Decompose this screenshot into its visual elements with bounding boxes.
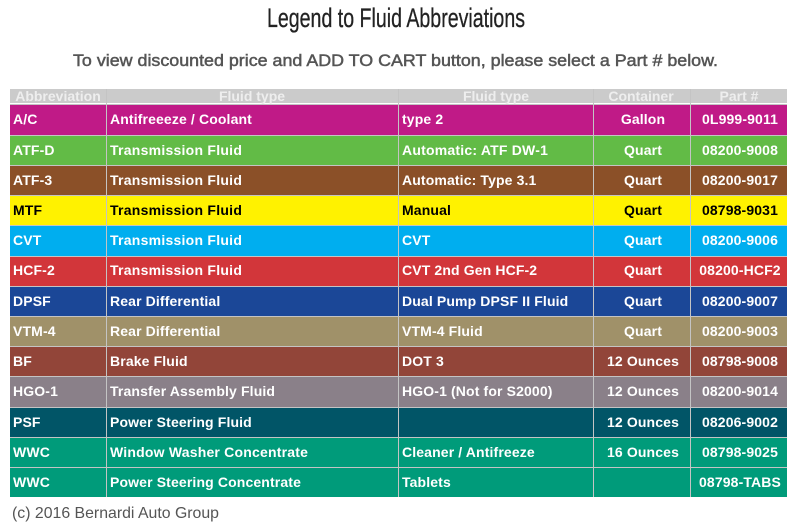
row: HGO-1: 08200-9014	[702, 383, 778, 399]
row: WWC steering: Tablets	[402, 474, 451, 490]
row: PSF: Power Steering Fluid	[110, 414, 252, 430]
row: PSF: PSF	[13, 414, 41, 430]
row: HCF-2	[10, 256, 787, 287]
row: PSF: 08206-9002	[702, 414, 778, 430]
row: ATF-D: Quart	[624, 142, 662, 158]
row: HCF-2: CVT 2nd Gen HCF-2	[402, 262, 537, 278]
row: ATF-D: Transmission Fluid	[110, 142, 242, 158]
row: A/C: 0L999-9011	[702, 111, 778, 127]
row: WWC washer: Window Washer Concentrate	[110, 444, 308, 460]
row: ATF-3: Automatic: Type 3.1	[402, 172, 537, 188]
row: ATF-3: 08200-9017	[702, 172, 778, 188]
row: VTM-4: Quart	[624, 323, 662, 339]
row: A/C	[10, 105, 787, 135]
row: DPSF: Rear Differential	[110, 293, 220, 309]
row: WWC washer	[10, 438, 787, 468]
row: PSF	[10, 408, 787, 438]
row: DPSF: 08200-9007	[702, 293, 778, 309]
row: BF: BF	[13, 353, 32, 369]
row: VTM-4: VTM-4	[13, 323, 56, 339]
row: HCF-2: 08200-HCF2	[699, 262, 781, 278]
row: DPSF: Dual Pump DPSF II Fluid	[402, 293, 568, 309]
row: CVT: Transmission Fluid	[110, 232, 242, 248]
row: HCF-2: Quart	[624, 262, 662, 278]
row: PSF: 12 Ounces	[607, 414, 679, 430]
row: A/C: type 2	[402, 111, 443, 127]
row: WWC washer: 08798-9025	[702, 444, 778, 460]
table header row: Fluid type	[463, 88, 529, 104]
row: DPSF	[10, 287, 787, 317]
row: HGO-1	[10, 377, 787, 408]
row: HGO-1: Transfer Assembly Fluid	[110, 383, 275, 399]
subtitle instruction: To view discounted price and ADD TO CART button, please select a Part # below.	[73, 51, 718, 70]
row: A/C: Gallon	[621, 111, 665, 127]
row: DPSF: Quart	[624, 293, 662, 309]
row: WWC washer: 16 Ounces	[607, 444, 679, 460]
row: HCF-2: Transmission Fluid	[110, 262, 242, 278]
row: MTF: Quart	[624, 202, 662, 218]
row: VTM-4	[10, 317, 787, 347]
row: VTM-4: 08200-9003	[702, 323, 778, 339]
row: ATF-D: 08200-9008	[702, 142, 778, 158]
row: MTF: MTF	[13, 202, 42, 218]
row: ATF-3	[10, 166, 787, 196]
row: WWC steering	[10, 468, 787, 497]
row: ATF-D: Automatic: ATF DW-1	[402, 142, 548, 158]
row: CVT	[10, 226, 787, 256]
table header row: Fluid type	[219, 88, 285, 104]
row: ATF-3: Transmission Fluid	[110, 172, 242, 188]
row: CVT: CVT	[402, 232, 431, 248]
table header row: Container	[608, 88, 674, 104]
row: DPSF: DPSF	[13, 293, 51, 309]
row: BF	[10, 347, 787, 377]
row: WWC washer: WWC	[13, 444, 50, 460]
row: BF: Brake Fluid	[110, 353, 188, 369]
row: ATF-3: Quart	[624, 172, 662, 188]
row: WWC steering: WWC	[13, 474, 50, 490]
row: HGO-1: HGO-1	[13, 383, 58, 399]
row: ATF-D: ATF-D	[13, 142, 55, 158]
row: VTM-4: VTM-4 Fluid	[402, 323, 483, 339]
row: ATF-D	[10, 135, 787, 166]
row: A/C: A/C	[13, 111, 38, 127]
row: MTF: Manual	[402, 202, 451, 218]
row: WWC washer: Cleaner / Antifreeze	[402, 444, 535, 460]
row: MTF: Transmission Fluid	[110, 202, 242, 218]
row: MTF	[10, 196, 787, 226]
row: BF: DOT 3	[402, 353, 444, 369]
row: A/C: Antifreeeze / Coolant	[110, 111, 252, 127]
row: HGO-1: HGO-1 (Not for S2000)	[402, 383, 553, 399]
row: CVT: CVT	[13, 232, 42, 248]
row: ATF-3: ATF-3	[13, 172, 52, 188]
row: WWC steering: Power Steering Concentrate	[110, 474, 301, 490]
table header row: Part #	[720, 88, 759, 104]
row: CVT: Quart	[624, 232, 662, 248]
table header row	[10, 88, 787, 104]
table	[10, 88, 787, 497]
row: BF: 12 Ounces	[607, 353, 679, 369]
row: HCF-2: HCF-2	[13, 262, 55, 278]
row: BF: 08798-9008	[702, 353, 778, 369]
row: MTF: 08798-9031	[702, 202, 778, 218]
row: HGO-1: 12 Ounces	[607, 383, 679, 399]
row: WWC steering: 08798-TABS	[699, 474, 781, 490]
row: VTM-4: Rear Differential	[110, 323, 220, 339]
copyright footer: (c) 2016 Bernardi Auto Group	[12, 505, 219, 522]
title: Legend to Fluid Abbreviations	[267, 3, 525, 33]
table header row: Abbreviation	[15, 88, 101, 104]
row: CVT: 08200-9006	[702, 232, 778, 248]
